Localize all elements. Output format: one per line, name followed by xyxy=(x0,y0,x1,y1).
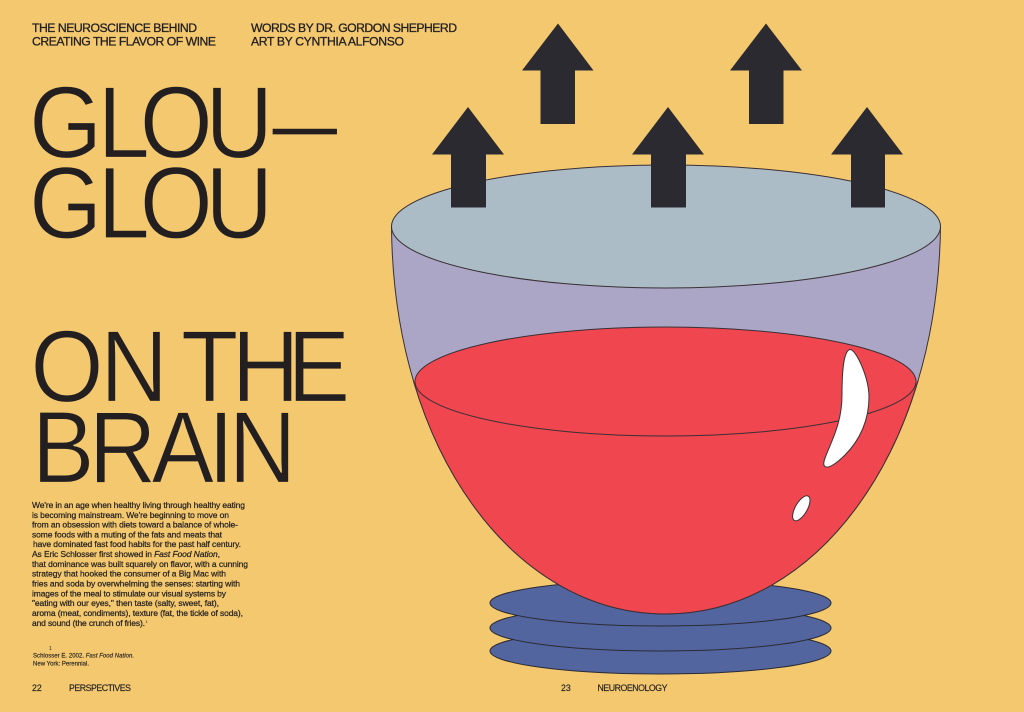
body text: from an obsession with diets toward a balance of whole- xyxy=(32,520,238,530)
arrow 1 xyxy=(432,107,504,208)
title: BRAIN xyxy=(32,390,296,504)
body text: aroma (meat, condiments), texture (fat, the tickle of soda), xyxy=(32,608,243,618)
illustration: small highlight xyxy=(789,493,813,523)
wine surface xyxy=(415,327,916,436)
body text: fries and soda by overwhelming the senses: starting with xyxy=(32,578,240,588)
header: credits xyxy=(251,21,457,48)
footnote: New York: Perennial. xyxy=(33,662,89,668)
body text: We're in an age when healthy living through healthy eating xyxy=(32,500,245,510)
illustration: large highlight xyxy=(824,349,869,467)
body text: and sound (the crunch of fries). xyxy=(32,618,145,628)
arrows rising from the bowl xyxy=(432,24,903,208)
header: subject line: THE NEUROSCIENCE BEHIND xyxy=(32,21,197,35)
footnote: Schlosser E. 2002. Fast Food Nation. xyxy=(33,654,134,660)
header: credits: WORDS BY DR. GORDON SHEPHERD xyxy=(251,21,457,35)
body text: strategy that hooked the consumer of a Big Mac with xyxy=(32,569,226,579)
page footer: left xyxy=(32,683,131,693)
page footer: left: PERSPECTIVES xyxy=(69,683,131,693)
title: GLOU xyxy=(29,65,273,179)
body text: that dominance was built squarely on flavor, with a cunning xyxy=(32,559,248,569)
body text xyxy=(32,500,248,628)
footnote: 1 xyxy=(49,646,52,652)
illustration: plates xyxy=(490,580,831,674)
body text: "eating with our eyes," then taste (salty, sweet, fat), xyxy=(32,598,219,608)
header: credits: ART BY CYNTHIA ALFONSO xyxy=(251,34,404,48)
body text: images of the meal to stimulate our visual systems by xyxy=(32,588,227,598)
page footer: left: 22 xyxy=(32,683,42,693)
body text: 1 xyxy=(146,619,148,624)
title xyxy=(29,65,350,504)
page footer: right: 23 xyxy=(561,683,571,693)
arrow 5 xyxy=(831,107,903,208)
wine in bowl xyxy=(413,381,918,614)
page footer: right xyxy=(561,683,668,693)
body text: As Eric Schlosser first showed in Fast Food Nation, xyxy=(32,549,220,559)
illustration: bowl xyxy=(392,165,940,614)
page footer: right: NEUROENOLOGY xyxy=(598,683,668,693)
bowl body xyxy=(392,226,940,614)
arrow 3 xyxy=(632,107,704,208)
body text: have dominated fast food habits for the past half century. xyxy=(33,539,241,549)
footnote xyxy=(33,646,134,668)
title: — xyxy=(272,67,338,180)
header: subject line: CREATING THE FLAVOR OF WINE xyxy=(32,34,216,48)
wine surface edge xyxy=(415,382,916,436)
header: subject line xyxy=(32,21,216,48)
arrow 4 xyxy=(730,24,802,124)
body text: some foods with a muting of the fats and meats that xyxy=(32,530,223,540)
arrow 2 xyxy=(522,24,594,124)
title: GLOU xyxy=(29,145,273,260)
bowl rim xyxy=(392,165,940,288)
body text: is becoming mainstream. We're beginning to move on xyxy=(32,510,229,520)
title: ON THE xyxy=(30,309,350,423)
